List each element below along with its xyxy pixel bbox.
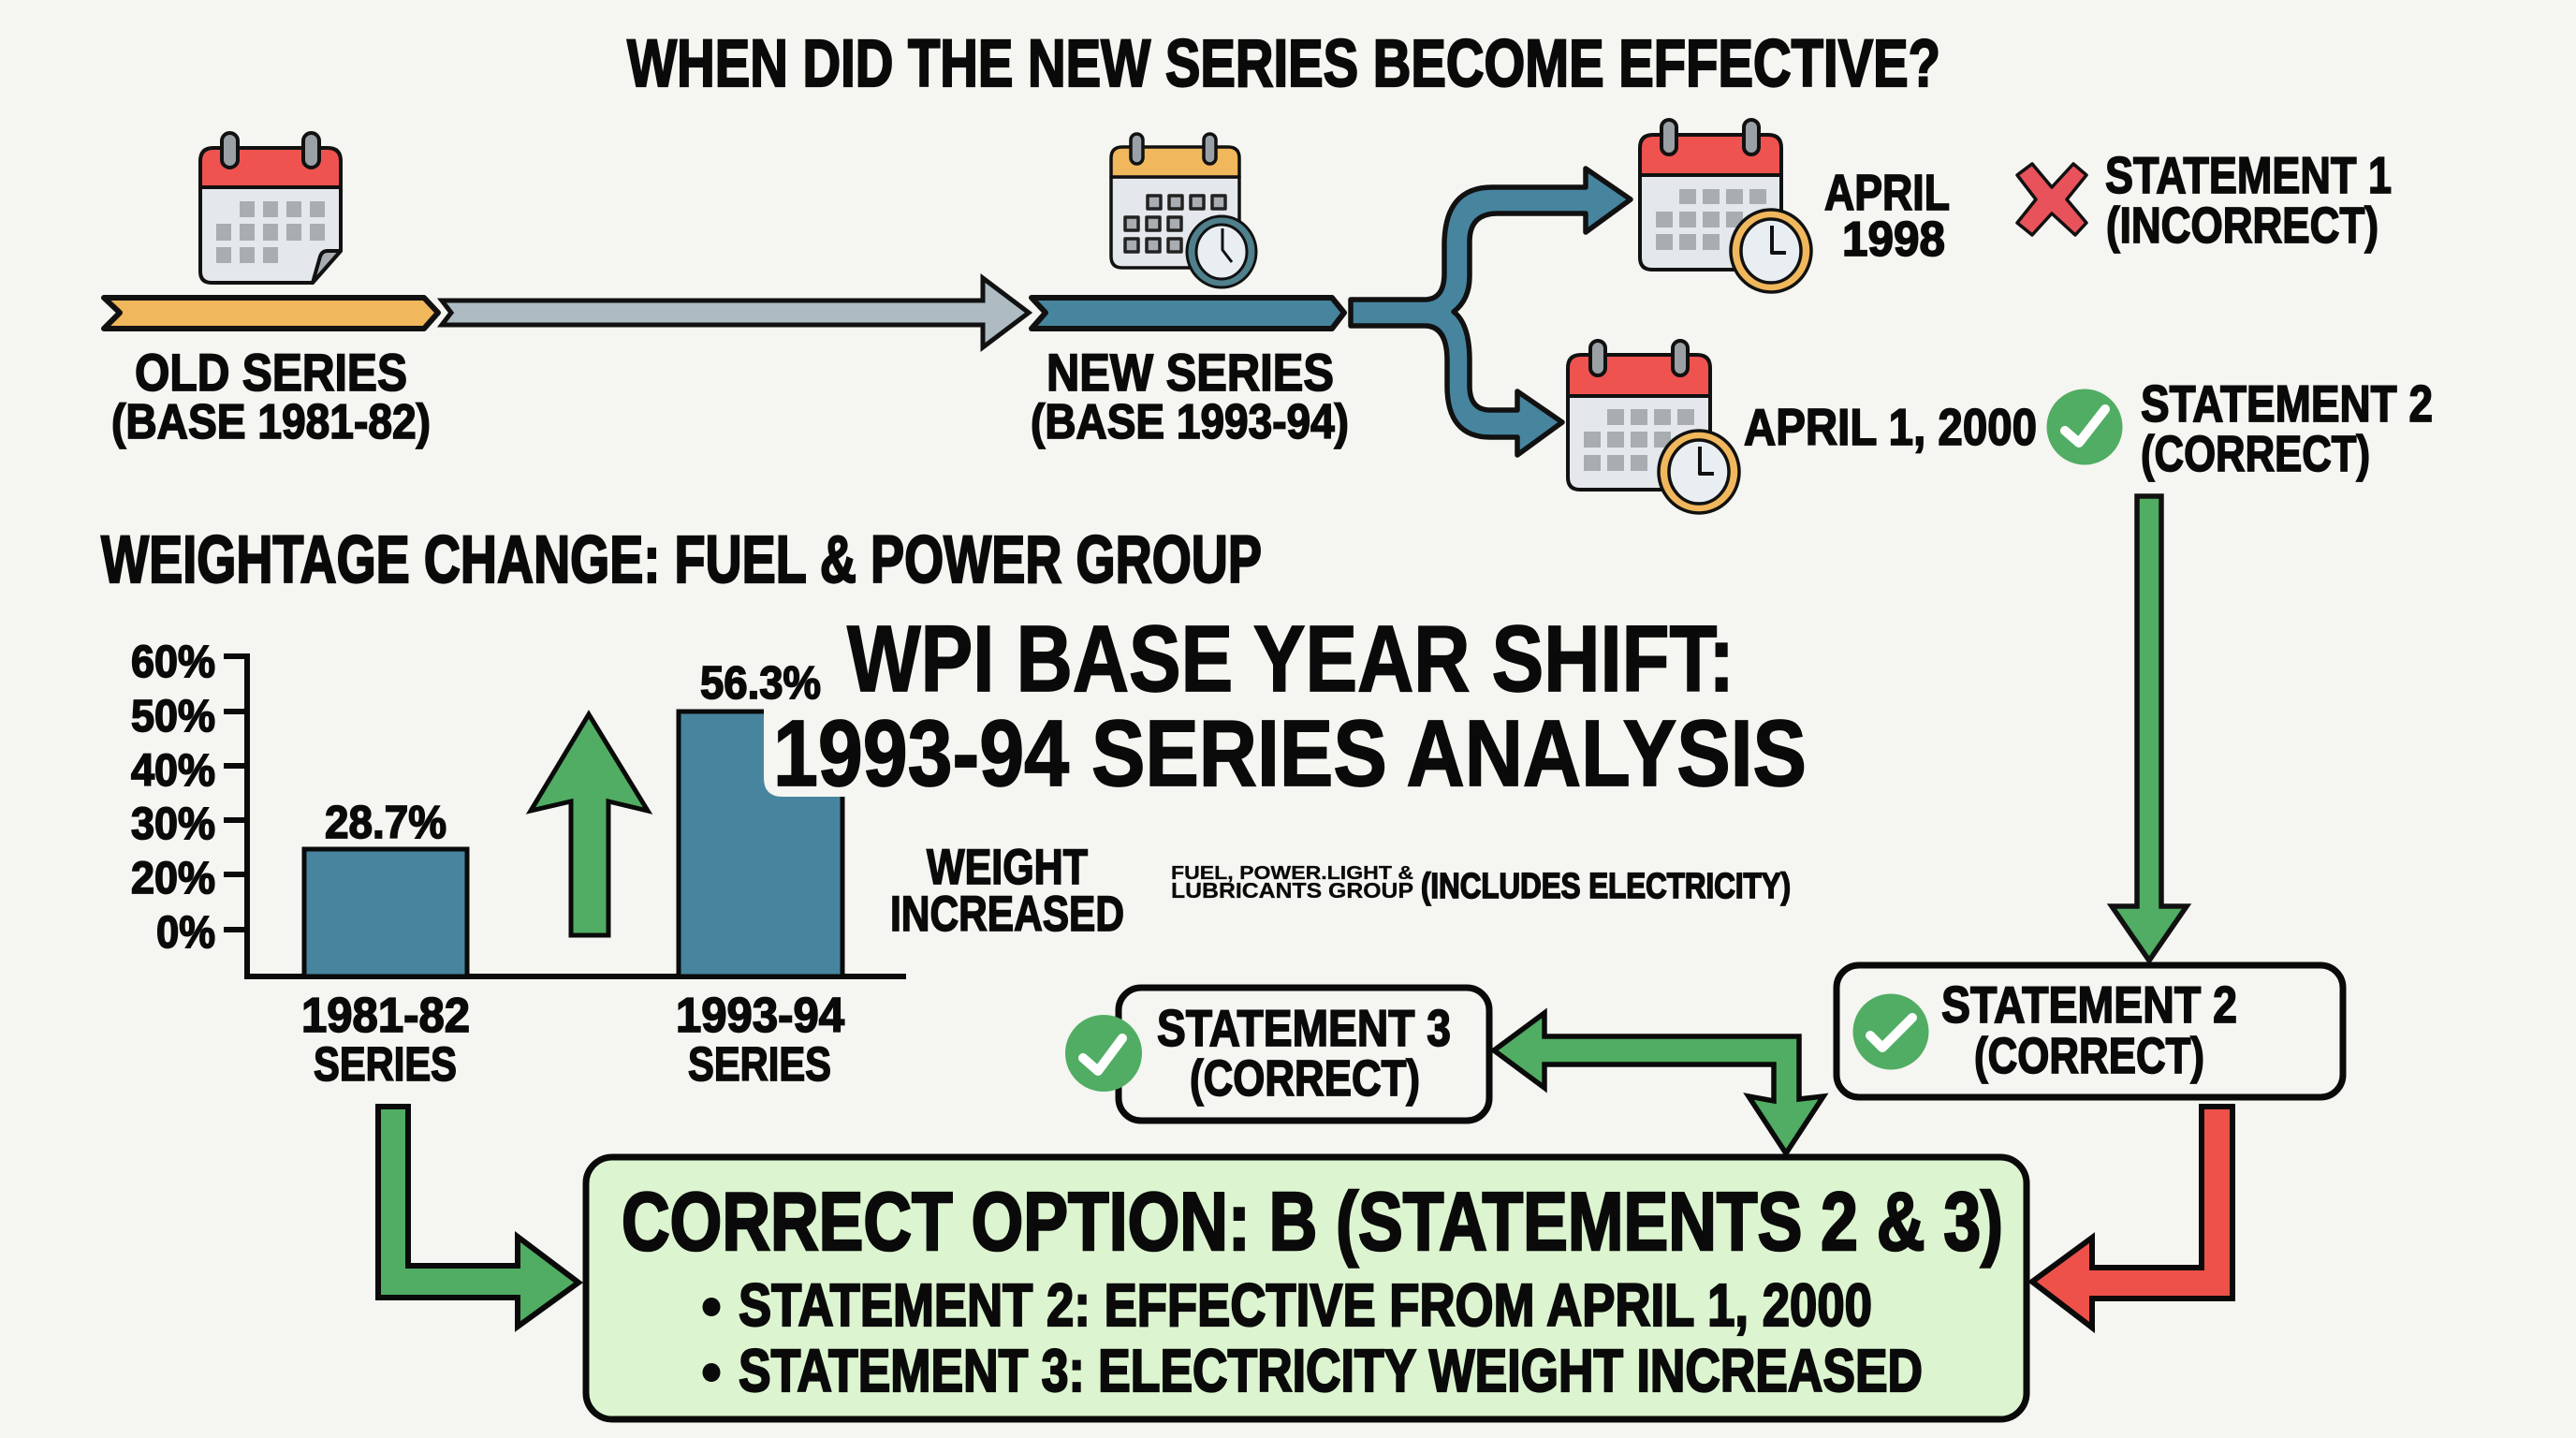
answer heading: CORRECT OPTION: B (STATEMENTS 2 & 3)	[622, 1175, 2003, 1268]
label: fuel power light and lubricants group	[1171, 863, 1413, 902]
bullet: statement 3: STATEMENT 3: ELECTRICITY WEIGHT INCREASED	[739, 1337, 1923, 1404]
label: weight increased	[890, 840, 1124, 942]
category label: 1981-82 series: SERIES	[314, 1037, 457, 1091]
date: april 1 2000: APRIL 1, 2000	[1744, 398, 2037, 456]
bullet: statement 2: STATEMENT 2: EFFECTIVE FROM APRIL 1, 2000	[739, 1271, 1872, 1339]
category label: 1993-94 series: SERIES	[688, 1037, 831, 1091]
icon: old series calendar	[200, 133, 341, 283]
title: when did the new series become effective: WHEN DID THE NEW SERIES BECOME EFFECTIVE?	[627, 27, 1940, 101]
y axis labels: 40%	[131, 746, 215, 796]
statement 3 text	[1157, 999, 1451, 1107]
icon: april 1 2000 calendar with clock	[1568, 341, 1739, 513]
panel: statement 3 box	[1065, 988, 1489, 1121]
statement 2 correct label: STATEMENT 2	[2141, 374, 2433, 433]
statement 1 incorrect label: (INCORRECT)	[2106, 198, 2378, 254]
arrow: old series bar to answer	[378, 1107, 578, 1327]
panel: correct option answer box	[586, 1157, 2027, 1419]
category label: 1993-94 series: 1993-94	[676, 989, 844, 1043]
icon: new series calendar with clock	[1111, 134, 1256, 287]
y axis labels: 30%	[131, 800, 215, 849]
statement 2 correct label	[2141, 374, 2433, 482]
y axis labels: 20%	[131, 854, 215, 903]
statement 3 text: (CORRECT)	[1190, 1050, 1420, 1107]
date: april 1998: 1998	[1842, 213, 1945, 267]
label: fuel power light and lubricants group: LUBRICANTS GROUP	[1171, 878, 1413, 902]
arrow: statement 2 to answer	[2032, 1107, 2232, 1328]
main title: WPI BASE YEAR SHIFT:	[847, 607, 1734, 712]
date: april 1998: APRIL	[1824, 165, 1950, 221]
old series label: OLD SERIES	[135, 343, 407, 402]
label: fuel power light and lubricants group: FUEL, POWER.LIGHT &	[1171, 863, 1413, 884]
statement 2 text	[1941, 976, 2237, 1084]
title patch over bar	[764, 709, 845, 797]
y axis labels: 60%	[131, 638, 215, 687]
heading: weightage change: WEIGHTAGE CHANGE: FUEL & POWER GROUP	[101, 523, 1262, 597]
y axis labels: 50%	[131, 692, 215, 741]
main title	[773, 607, 1807, 806]
arrow: new series forks to two dates	[1351, 169, 1631, 455]
category label: 1981-82 series	[301, 989, 470, 1091]
icon: green check	[2046, 389, 2123, 464]
icon: april 1998 calendar with clock	[1640, 120, 1811, 292]
bar: 1993-94 series	[679, 712, 842, 976]
old series label: (BASE 1981-82)	[111, 395, 431, 449]
bar: 1981-82 series	[304, 849, 467, 976]
main title: 1993-94 SERIES ANALYSIS	[773, 701, 1807, 806]
label: weight increased: INCREASED	[890, 887, 1124, 942]
date: april 1998	[1824, 165, 1950, 267]
arrow: old series to new series	[442, 278, 1029, 347]
new series label: NEW SERIES	[1046, 343, 1334, 402]
arrow: weight increase up	[531, 714, 648, 935]
label: weight increased: WEIGHT	[927, 840, 1088, 895]
old series label	[111, 343, 431, 449]
arrow: statement 2 down to box	[2112, 496, 2187, 961]
new series label	[1031, 343, 1349, 449]
panel: statement 2 box	[1837, 965, 2343, 1097]
bar chart: fuel and power group weight	[131, 638, 906, 1091]
label: includes electricity: (INCLUDES ELECTRICITY)	[1421, 867, 1791, 906]
old series ribbon	[104, 298, 438, 329]
new series ribbon	[1032, 298, 1344, 329]
statement 2 text: STATEMENT 2	[1941, 976, 2237, 1034]
statement 2 text: (CORRECT)	[1974, 1028, 2204, 1084]
category label: 1981-82 series: 1981-82	[301, 989, 470, 1043]
new series label: (BASE 1993-94)	[1031, 395, 1349, 449]
value: 28.7%: 28.7%	[325, 798, 446, 848]
icon: red cross	[2017, 164, 2086, 235]
value: 56.3%: 56.3%	[700, 658, 821, 709]
axes and ticks	[224, 656, 906, 976]
statement 1 incorrect label: STATEMENT 1	[2105, 146, 2392, 204]
statement 3 text: STATEMENT 3	[1157, 999, 1451, 1057]
icon: green check	[1853, 994, 1928, 1069]
arrow: statement 3 and final answer connector	[1494, 1013, 1823, 1153]
statement 1 incorrect label	[2105, 146, 2392, 254]
y axis labels	[131, 638, 215, 958]
category label: 1993-94 series	[676, 989, 844, 1091]
icon: green check	[1065, 1015, 1142, 1092]
y axis labels: 0%	[156, 908, 215, 958]
statement 2 correct label: (CORRECT)	[2141, 426, 2370, 482]
